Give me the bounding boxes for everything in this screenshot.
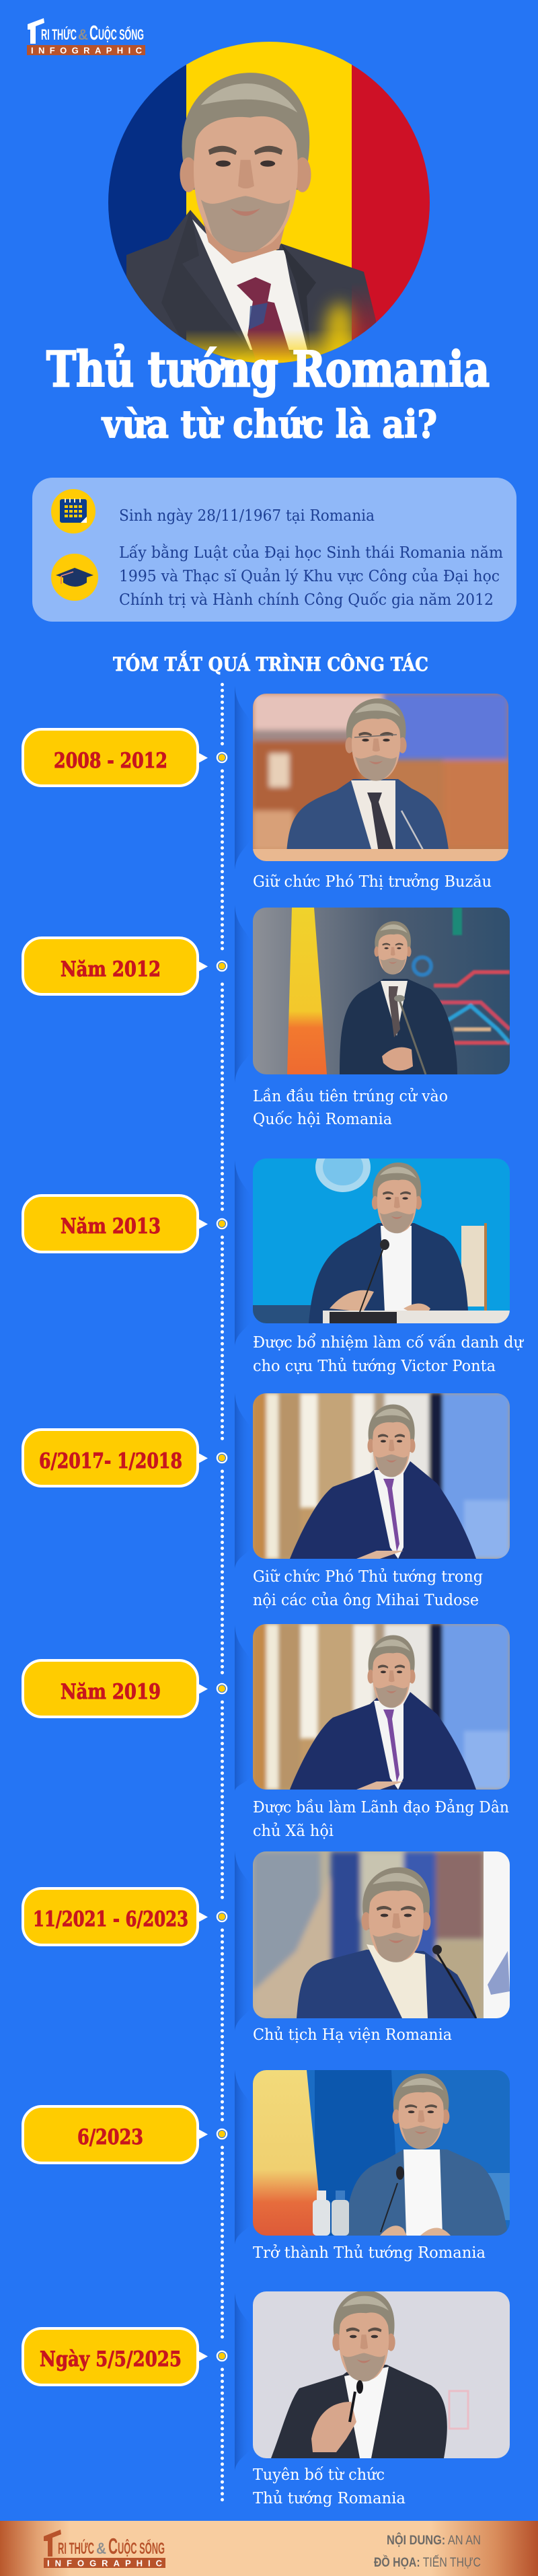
item 8: Ngày 5/5/2025 [23, 2290, 510, 2507]
caption: Trở thành Thủ tướng Romania [253, 2244, 486, 2262]
photo [253, 908, 510, 1074]
timeline node [217, 1912, 227, 1921]
timeline node [217, 753, 227, 762]
text: education: 1995 và Thạc sĩ Quản lý Khu vực Công của Đại học [119, 568, 500, 585]
date pill: 6/2017- 1/2018 [39, 1449, 182, 1473]
caption [253, 1333, 524, 1375]
caption [253, 2466, 406, 2507]
date pill [23, 1195, 208, 1252]
date pill: Năm 2013 [61, 1214, 161, 1239]
item 5: Năm 2019 [23, 1624, 510, 1840]
logo: Tri thức & Cuộc sống Infographic: RI THỨC [41, 26, 77, 43]
timeline node [217, 961, 227, 971]
timeline shadow strips [235, 686, 253, 2471]
caption: Lần đầu tiên trúng cử vào [253, 1088, 448, 1105]
text: education: Lấy bằng Luật của Đại học Sinh thái Romania năm [119, 544, 503, 562]
footer credits: ĐỒ HỌA: TIẾN THỰC [374, 2555, 481, 2570]
caption [253, 1568, 483, 1609]
item 7: 6/2023 [23, 2070, 510, 2262]
date pill [23, 1888, 208, 1945]
icon: graduation cap [51, 554, 98, 601]
footer logo [44, 2530, 165, 2569]
logo: Tri thức & Cuộc sống Infographic [27, 18, 145, 55]
photo [253, 2290, 510, 2458]
title [46, 340, 490, 447]
logo: Tri thức & Cuộc sống Infographic: C [89, 21, 98, 44]
date pill [23, 2328, 208, 2385]
footer credits: NỘI DUNG: AN AN [387, 2533, 481, 2548]
caption: Tuyên bố từ chức [253, 2466, 385, 2484]
caption: chủ Xã hội [253, 1823, 334, 1840]
timeline dotted line [221, 685, 224, 2503]
heading: career summary: TÓM TẮT QUÁ TRÌNH CÔNG TÁC [113, 651, 428, 675]
photo [253, 694, 508, 862]
footer logo: INFOGRAPHIC [47, 2558, 163, 2569]
panel: personal information [32, 478, 516, 622]
date pill [23, 1430, 208, 1486]
footer logo: C [108, 2534, 118, 2559]
item 6: 11/2021 - 6/2023 [23, 1851, 510, 2044]
footer credits [374, 2533, 481, 2570]
caption: Giữ chức Phó Thị trưởng Buzău [253, 873, 492, 891]
timeline node [217, 1684, 227, 1693]
caption: cho cựu Thủ tướng Victor Ponta [253, 1358, 496, 1375]
item 1: 2008 - 2012 [23, 694, 508, 891]
photo [253, 1393, 510, 1559]
photo [253, 1142, 510, 1323]
date pill [23, 2106, 208, 2163]
item 2: Năm 2012 [23, 908, 510, 1128]
footer band [0, 2521, 538, 2576]
footer logo: RI THỨC [58, 2539, 94, 2558]
text: education: Chính trị và Hành chính Công Quốc gia năm 2012 [119, 591, 494, 609]
photo [253, 2070, 510, 2236]
date pill: Năm 2019 [61, 1680, 161, 1704]
date pill [23, 938, 208, 994]
text: birth: Sinh ngày 28/11/1967 tại Romania [119, 507, 375, 525]
icon: calendar [51, 489, 95, 533]
photo [253, 1624, 510, 1790]
logo: Tri thức & Cuộc sống Infographic: & [78, 26, 88, 43]
caption: Chủ tịch Hạ viện Romania [253, 2026, 452, 2044]
caption: Thủ tướng Romania [253, 2490, 406, 2507]
logo: Tri thức & Cuộc sống Infographic: UỘC SỐNG [98, 26, 144, 43]
date pill [23, 729, 208, 786]
timeline node [217, 1219, 227, 1228]
caption: Được bầu làm Lãnh đạo Đảng Dân [253, 1799, 509, 1816]
item 4: 6/2017 - 1/2018 [23, 1393, 510, 1609]
date pill: Năm 2012 [61, 957, 161, 982]
footer logo: UỘC SỐNG [118, 2539, 165, 2558]
caption [253, 1799, 509, 1840]
date pill [23, 1660, 208, 1717]
date pill: 2008 - 2012 [54, 749, 167, 773]
timeline node [217, 1453, 227, 1463]
caption: Giữ chức Phó Thủ tướng trong [253, 1568, 483, 1586]
logo: Tri thức & Cuộc sống Infographic: INFOGRAPHIC [31, 46, 143, 55]
hero portrait on Romanian flag circle [108, 42, 430, 377]
text: education [119, 544, 503, 609]
footer logo: & [96, 2540, 106, 2558]
caption [253, 1088, 448, 1128]
caption: nội các của ông Mihai Tudose [253, 1592, 479, 1609]
item 3: Năm 2013 [23, 1142, 524, 1375]
caption: Được bổ nhiệm làm cố vấn danh dự [253, 1333, 524, 1352]
date pill: 6/2023 [77, 2125, 143, 2149]
timeline node [217, 2351, 227, 2361]
photo [253, 1851, 510, 2018]
date pill: 11/2021 - 6/2023 [33, 1907, 188, 1931]
date pill: Ngày 5/5/2025 [40, 2347, 182, 2371]
title: vừa từ chức là ai? [101, 402, 437, 447]
caption: Quốc hội Romania [253, 1111, 392, 1128]
timeline node [217, 2129, 227, 2139]
